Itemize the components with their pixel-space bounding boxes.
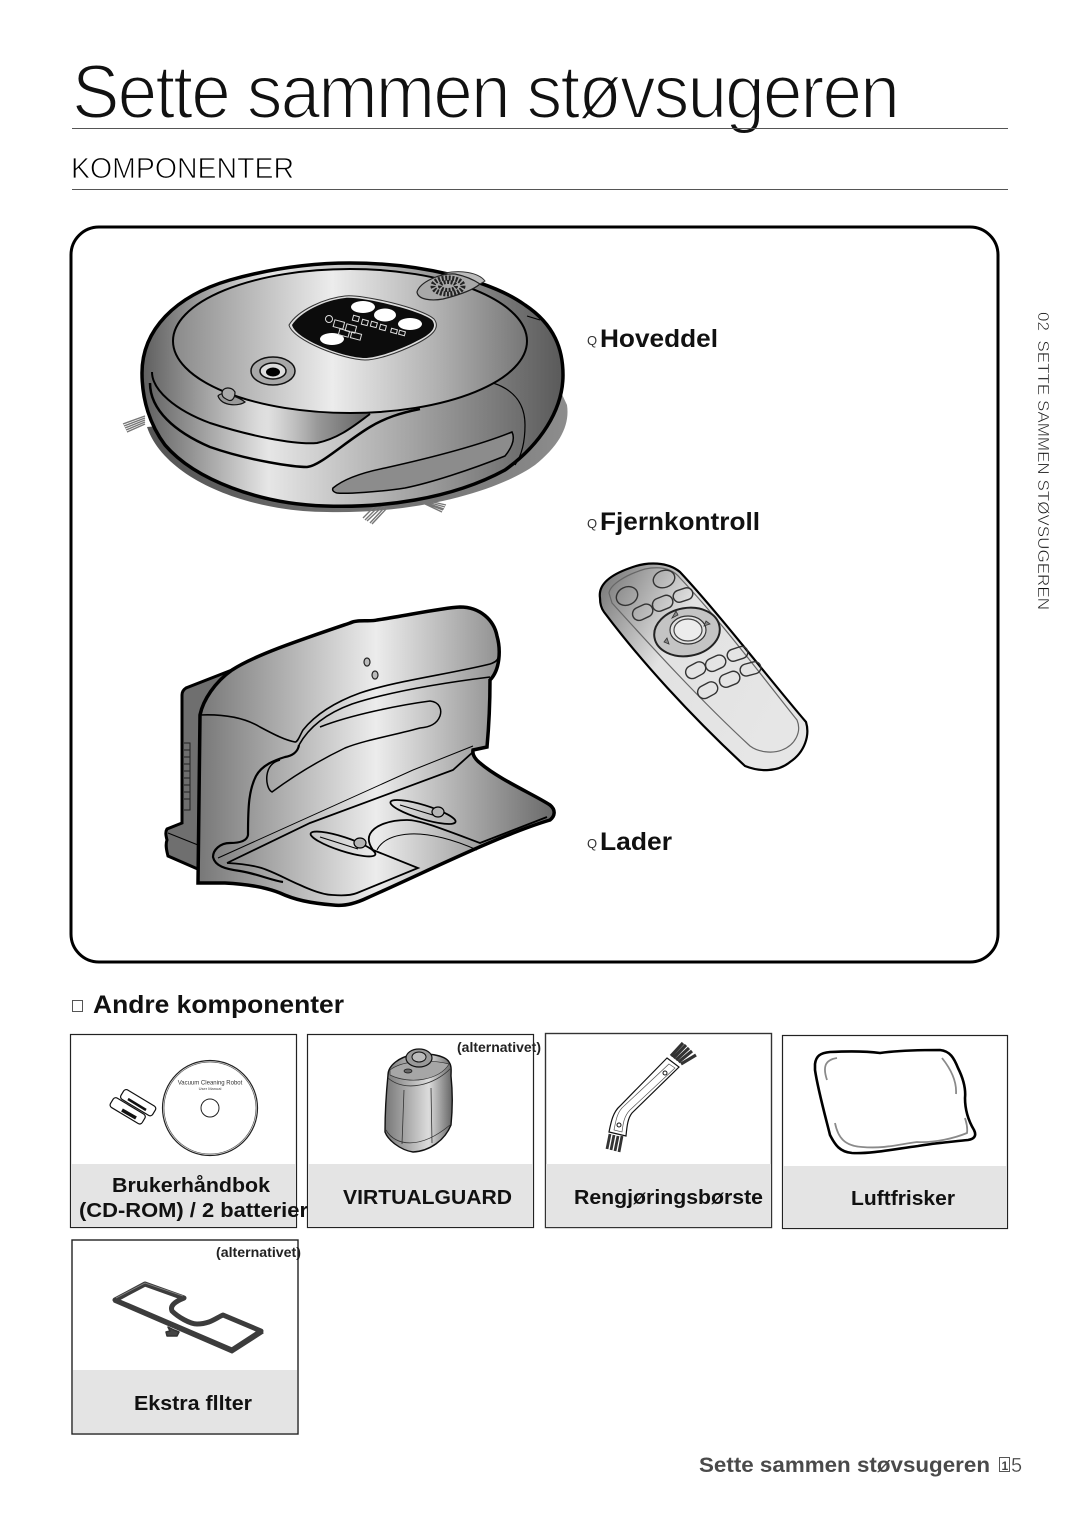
label: Fjernkontroll: Q [587, 516, 597, 531]
label: luftfrisker: Luftfrisker [851, 1188, 955, 1210]
charger main body [198, 607, 554, 905]
remote buttons [613, 567, 762, 701]
panel: main components [71, 227, 998, 962]
illustration: charger [166, 607, 554, 905]
label: Lader: Lader [600, 828, 672, 856]
card: virtualguard [308, 1034, 541, 1228]
label: alternativet: (alternativet) [457, 1039, 541, 1055]
label: rengjøringsbørste: Rengjøringsbørste [574, 1187, 763, 1209]
charger contact pads [309, 795, 458, 861]
robot wedge [250, 400, 372, 443]
icon: CD-ROM [162, 1060, 258, 1156]
label: alternativet: (alternativet) [216, 1244, 301, 1260]
icon: CD-ROM: User Manual [199, 1086, 221, 1091]
card: extra filter [72, 1240, 301, 1434]
icon: filter frame [114, 1283, 263, 1352]
icon: batteries [109, 1088, 157, 1125]
robot top disc [173, 269, 527, 413]
heading: andre komponenter: Andre komponenter [93, 991, 344, 1019]
control panel [289, 296, 436, 360]
title: Sette sammen støvsugeren [72, 50, 898, 135]
charger indicator lights [364, 658, 378, 679]
illustration: robot vacuum [123, 263, 568, 524]
camera lens [251, 357, 295, 385]
label: Hoveddel: Q [587, 333, 597, 348]
section heading: komponenter: KOMPONENTER [71, 153, 294, 185]
footer: page title and number: Sette sammen støvsugeren [699, 1454, 990, 1477]
label: cd-rom and batteries: (CD-ROM) / 2 batterier [79, 1199, 308, 1222]
icon: CD-ROM: Vacuum Cleaning Robot [178, 1080, 243, 1086]
illustration: remote control [600, 563, 807, 770]
label: brukerhåndbok: Brukerhåndbok [112, 1174, 271, 1197]
label: Hoveddel: Hoveddel [600, 325, 718, 353]
robot shadow [147, 390, 568, 512]
side knob [218, 388, 245, 405]
robot body [142, 263, 563, 506]
robot brushes [123, 416, 446, 524]
side label: 02 SETTE SAMMEN STØVSUGEREN [1034, 312, 1051, 610]
label: ekstra filter: Ekstra fllter [134, 1392, 252, 1415]
footer: page title and number: 5 [1011, 1455, 1022, 1477]
top vent [417, 272, 485, 300]
robot side slot [333, 432, 513, 493]
charger inner contour lines [200, 655, 547, 895]
charger back block [166, 670, 232, 870]
label: Lader: Q [587, 836, 597, 851]
card: user manual and batteries [70, 1034, 308, 1228]
label: Fjernkontroll: Fjernkontroll [600, 508, 760, 536]
label: virtualguard: VIRTUALGUARD [343, 1187, 512, 1209]
card: cleaning brush [546, 1034, 772, 1228]
icon: air freshener [815, 1050, 975, 1153]
robot body lines [150, 316, 540, 467]
icon: virtualguard device [385, 1049, 452, 1152]
card: air freshener [782, 1036, 1008, 1228]
remote body [600, 563, 807, 770]
icon: cleaning brush [607, 1043, 696, 1152]
remote navigation pad [650, 603, 724, 661]
footer: page title and number: 1 [1002, 1459, 1008, 1473]
